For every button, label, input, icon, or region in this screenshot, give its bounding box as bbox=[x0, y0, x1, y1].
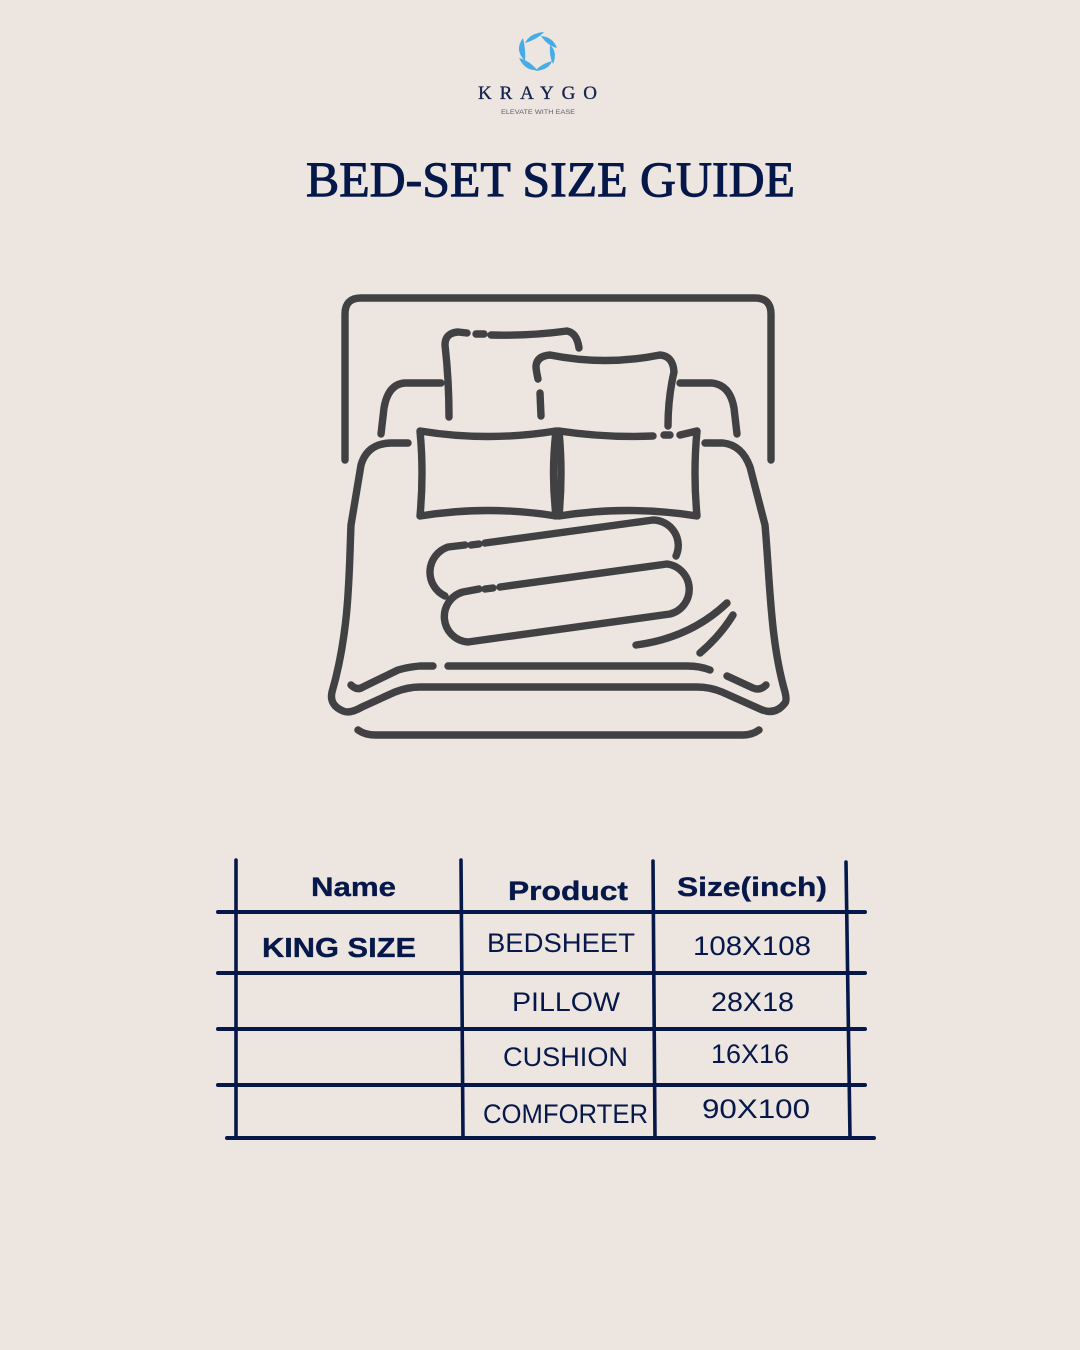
name: King Size: KING SIZE bbox=[262, 932, 416, 963]
table grid bbox=[218, 860, 874, 1138]
header: Name: Name bbox=[311, 872, 396, 902]
size table bbox=[218, 860, 874, 1138]
row: bedsheet bbox=[487, 928, 811, 961]
row: cushion: 16X16 bbox=[711, 1039, 789, 1069]
row: bedsheet: 108X108 bbox=[693, 931, 811, 961]
row: pillow: PILLOW bbox=[512, 987, 621, 1017]
duvet edge lines bbox=[351, 666, 766, 689]
title: BED-SET SIZE GUIDE bbox=[306, 151, 795, 207]
headboard bbox=[345, 298, 771, 460]
wordmark: KRAYGO bbox=[478, 83, 597, 104]
back pillow left bbox=[445, 331, 579, 417]
front pillow left bbox=[420, 431, 556, 516]
icon: blue leaf ring bbox=[519, 32, 557, 71]
row: bedsheet: BEDSHEET bbox=[487, 928, 635, 958]
logo: Kraygo bbox=[478, 32, 597, 116]
bolster top bbox=[430, 520, 678, 596]
row: cushion: CUSHION bbox=[503, 1042, 628, 1072]
icon: bed with pillows and bolsters bbox=[331, 298, 786, 735]
row: pillow: 28X18 bbox=[711, 987, 794, 1017]
row: comforter: COMFORTER bbox=[483, 1099, 648, 1129]
mattress outline bbox=[331, 443, 786, 712]
bed frame base bbox=[358, 730, 759, 735]
header: Product: Product bbox=[508, 876, 628, 906]
row: pillow bbox=[512, 987, 794, 1017]
row: comforter: 90X100 bbox=[702, 1094, 810, 1124]
back pillow right bbox=[536, 355, 674, 426]
front pillow right bbox=[559, 431, 697, 516]
fabric folds bbox=[636, 603, 733, 653]
row: cushion bbox=[503, 1039, 789, 1072]
tagline: ELEVATE WITH EASE bbox=[501, 109, 576, 116]
side pillows bbox=[381, 383, 737, 434]
bolster bottom bbox=[444, 564, 689, 642]
row: comforter bbox=[483, 1094, 810, 1129]
header: Size(inch): Size(inch) bbox=[677, 872, 827, 902]
